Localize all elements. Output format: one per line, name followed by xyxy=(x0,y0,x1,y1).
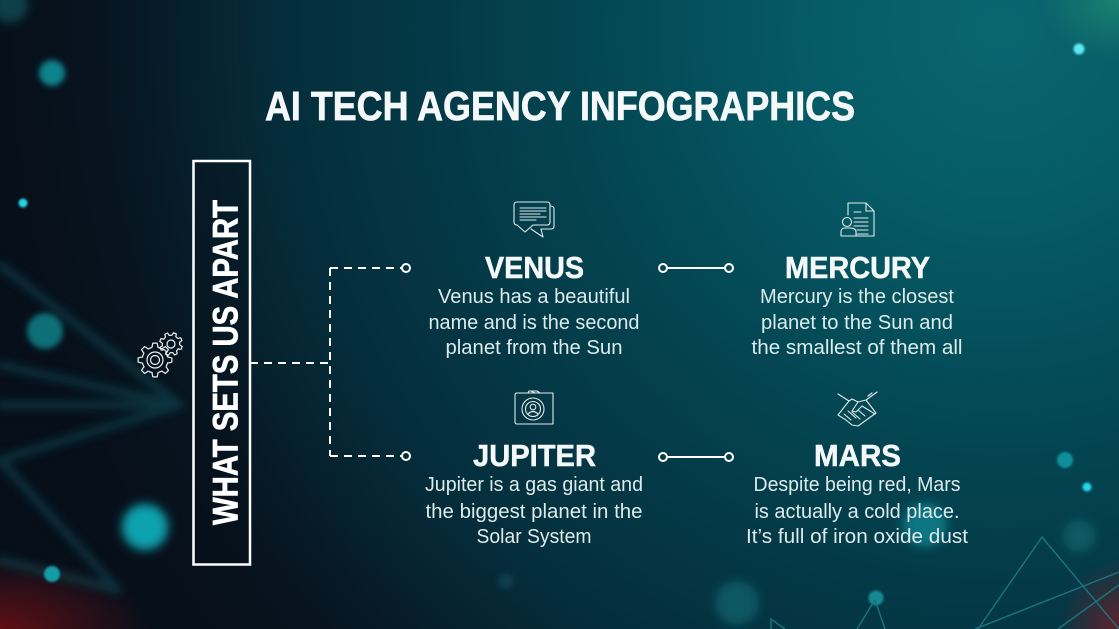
block: jupiter: Solar System xyxy=(476,526,592,548)
title: AI TECH AGENCY INFOGRAPHICS xyxy=(265,83,855,129)
block: jupiter xyxy=(425,438,643,548)
icon: gears xyxy=(138,329,186,377)
connector end: top xyxy=(402,264,410,272)
block: jupiter: Jupiter is a gas giant and xyxy=(425,474,643,496)
block: mars: It’s full of iron oxide dust xyxy=(746,526,968,548)
block: jupiter: the biggest planet in the xyxy=(426,501,642,523)
block: mercury: MERCURY xyxy=(785,250,930,285)
block: mercury xyxy=(752,250,962,359)
block: venus: Venus has a beautiful xyxy=(438,286,630,308)
block: venus: VENUS xyxy=(485,250,584,285)
icon: speech bubbles xyxy=(514,202,554,237)
connector: venus to mercury xyxy=(659,264,733,272)
icon: document with person xyxy=(841,203,874,236)
sidebar: what sets us apart xyxy=(194,161,250,564)
block: venus xyxy=(428,250,640,359)
connector end: bottom xyxy=(402,452,410,460)
connector: dashed tree xyxy=(250,268,401,456)
icon: handshake xyxy=(838,392,877,426)
sidebar: what sets us apart: WHAT SETS US APART xyxy=(206,200,246,525)
connector: jupiter to mars xyxy=(659,453,733,461)
block: jupiter: JUPITER xyxy=(473,438,596,473)
block: mercury: the smallest of them all xyxy=(752,337,962,359)
icon: folder with person xyxy=(515,391,553,424)
block: mars: is actually a cold place. xyxy=(754,501,960,523)
block: mars: MARS xyxy=(814,438,901,473)
block: mercury: planet to the Sun and xyxy=(761,312,953,334)
block: mercury: Mercury is the closest xyxy=(760,286,954,308)
block: mars: Despite being red, Mars xyxy=(754,474,960,496)
block: venus: name and is the second xyxy=(428,312,640,334)
block: mars xyxy=(746,438,968,548)
block: venus: planet from the Sun xyxy=(446,337,622,359)
